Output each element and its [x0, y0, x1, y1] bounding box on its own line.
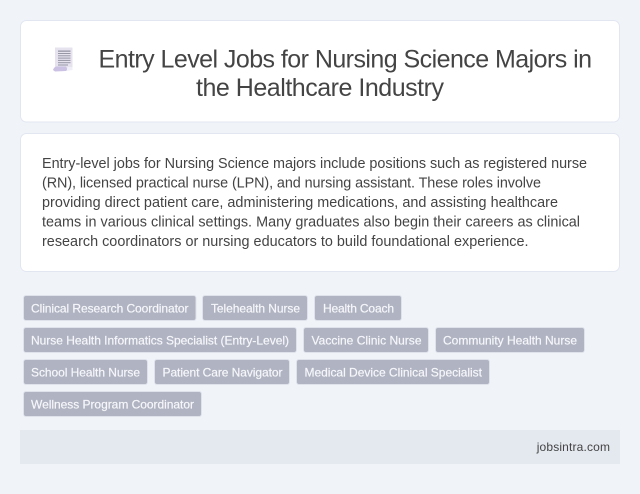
tag: Health Coach: [314, 296, 402, 320]
tag: Medical Device Clinical Specialist: [296, 360, 490, 384]
tag: Vaccine Clinic Nurse: [304, 328, 428, 352]
tag list: [24, 296, 584, 416]
description text: [42, 156, 587, 250]
footer bar: [20, 430, 620, 464]
tag: Telehealth Nurse: [202, 296, 308, 320]
tag: Community Health Nurse: Community Health Nurse: [443, 333, 577, 347]
tag: Patient Care Navigator: Patient Care Navigator: [162, 365, 282, 379]
description text: providing direct patient care, administering medications, and assisting healthcare: [42, 195, 558, 211]
description text: teams in various clinical settings. Many graduates also begin their careers as clinical: [42, 214, 580, 230]
tag: Clinical Research Coordinator: [24, 296, 196, 320]
tag: School Health Nurse: [24, 360, 148, 384]
tag: Health Coach: Health Coach: [323, 301, 394, 315]
panel: title card: [20, 20, 620, 122]
description text: (RN), licensed practical nurse (LPN), and nursing assistant. These roles involve: [42, 176, 541, 192]
description text: research coordinators or nursing educators to build foundational experience.: [42, 234, 528, 250]
tag: Telehealth Nurse: Telehealth Nurse: [211, 301, 300, 315]
tag: Patient Care Navigator: [154, 360, 290, 384]
tag: Clinical Research Coordinator: Clinical Research Coordinator: [31, 301, 188, 315]
title: [98, 46, 592, 102]
tag: School Health Nurse: School Health Nurse: [31, 365, 140, 379]
tag: Wellness Program Coordinator: Wellness Program Coordinator: [31, 397, 194, 411]
footer credit: jobsintra.com: [536, 440, 610, 454]
title: the Healthcare Industry: [196, 74, 444, 102]
tag: Wellness Program Coordinator: [24, 392, 202, 416]
tag: Medical Device Clinical Specialist: Medical Device Clinical Specialist: [304, 365, 483, 379]
title: Entry Level Jobs for Nursing Science Majors in: [98, 46, 592, 74]
tag: Vaccine Clinic Nurse: Vaccine Clinic Nurse: [312, 333, 422, 347]
description text: Entry-level jobs for Nursing Science majors include positions such as registered nurse: [42, 156, 587, 172]
tag: Nurse Health Informatics Specialist (Entry-Level): Nurse Health Informatics Specialist (Entry-Level): [31, 333, 289, 347]
panel: description card: [20, 134, 620, 272]
icon: document scroll: [53, 48, 72, 72]
tag: Nurse Health Informatics Specialist (Entry-Level): [24, 328, 296, 352]
tag: Community Health Nurse: [436, 328, 584, 352]
